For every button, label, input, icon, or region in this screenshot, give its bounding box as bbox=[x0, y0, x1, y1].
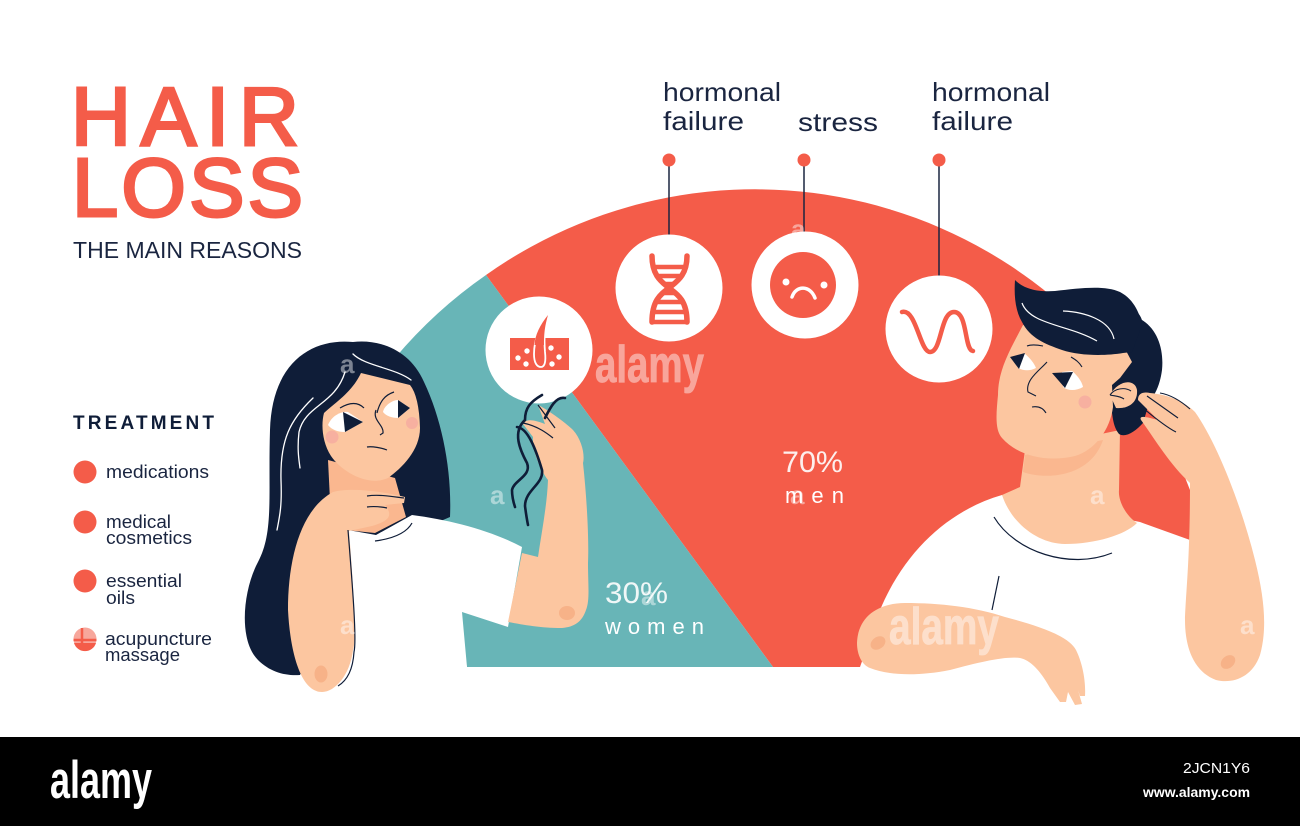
icon: sad face bbox=[752, 232, 858, 338]
woman: eyes bbox=[328, 400, 410, 432]
legend item: acupuncture massage: massage bbox=[105, 645, 180, 665]
subtitle: THE MAIN REASONS bbox=[73, 237, 302, 263]
woman: face bbox=[322, 373, 420, 481]
woman: elbow spot bbox=[559, 606, 575, 620]
label: stress: stress bbox=[798, 107, 878, 137]
man: cheek bbox=[1078, 396, 1092, 408]
footer: alamy logo: alamy bbox=[50, 751, 152, 810]
watermark: small marks: a bbox=[1090, 480, 1105, 510]
man: fringe bbox=[1015, 280, 1142, 355]
man: resting arm and hand bbox=[857, 603, 1085, 705]
watermark: small marks: a bbox=[790, 480, 805, 510]
man: sleeve line bbox=[992, 576, 999, 610]
watermark: small marks bbox=[340, 214, 1255, 640]
watermark: small marks: a bbox=[340, 349, 355, 379]
woman: facial lines bbox=[340, 392, 394, 450]
man: back hair bbox=[1100, 300, 1162, 435]
legend item: medical cosmetics: medical bbox=[106, 512, 171, 532]
icon: DNA helix bbox=[616, 234, 722, 342]
label line 2: failure bbox=[932, 106, 1013, 136]
woman: chin arm and hand bbox=[288, 490, 405, 692]
man figure bbox=[857, 280, 1264, 705]
man: neck bbox=[1002, 430, 1137, 544]
connector: middle pin bbox=[798, 154, 810, 232]
connector: left pin bbox=[662, 154, 676, 236]
legend item: acupuncture massage: acupuncture bbox=[105, 629, 212, 649]
icon: hormone wave bbox=[886, 276, 992, 382]
connector: right pin bbox=[932, 154, 946, 277]
legend item: medications: medications bbox=[106, 462, 209, 482]
footer bar bbox=[0, 737, 1300, 826]
watermark: small marks: a bbox=[1240, 610, 1255, 640]
woman: hair bbox=[245, 342, 450, 675]
legend item: essential oils: essential bbox=[106, 571, 182, 591]
man: hair highlights bbox=[1022, 303, 1114, 341]
legend item: medical cosmetics bbox=[74, 510, 192, 548]
woman: finger lines bbox=[523, 405, 555, 438]
woman: hair strands bbox=[512, 395, 565, 525]
legend item: medical cosmetics: cosmetics bbox=[106, 528, 192, 548]
legend heading: TREATMENT bbox=[73, 413, 214, 434]
footer: site: www.alamy.com bbox=[1142, 784, 1250, 800]
treatment legend bbox=[73, 413, 214, 665]
icon: hair follicle bbox=[486, 296, 592, 404]
watermark: alamy logos bbox=[595, 336, 999, 656]
woman: finger and arm lines bbox=[338, 495, 404, 686]
label: hormonal failure (right): hormonal bbox=[932, 77, 1050, 107]
chart label: men: men bbox=[785, 483, 844, 508]
man: finger lines bbox=[1143, 393, 1190, 432]
man: ear bbox=[1110, 382, 1137, 408]
title: LOSS bbox=[72, 141, 303, 234]
watermark: alamy logos: alamy bbox=[889, 598, 999, 656]
label line 2: failure bbox=[663, 106, 744, 136]
chart label: women: women bbox=[604, 614, 704, 639]
man: raised arm and hand bbox=[1138, 393, 1264, 681]
woman: elbow spot bbox=[314, 666, 328, 682]
man: neck shadow bbox=[1023, 440, 1103, 476]
chart label: men: 70% bbox=[782, 446, 843, 479]
man: eyes bbox=[1010, 353, 1083, 390]
woman: hair highlights bbox=[277, 354, 411, 530]
watermark: small marks: a bbox=[641, 581, 656, 611]
chart label: women bbox=[604, 577, 704, 639]
man: elbow spot bbox=[868, 633, 888, 653]
woman: neckline bbox=[375, 523, 412, 541]
man: elbow spot bbox=[1218, 652, 1238, 672]
watermark: small marks: a bbox=[340, 610, 355, 640]
man: facial lines bbox=[1027, 345, 1131, 413]
pie chart: men 70% wedge bbox=[486, 189, 1190, 667]
watermark: small marks: a bbox=[791, 214, 806, 244]
pie chart: women 30% wedge bbox=[395, 275, 773, 667]
legend item: essential oils: oils bbox=[106, 588, 135, 608]
title: HAIR bbox=[71, 70, 299, 163]
woman: neck bbox=[328, 460, 406, 533]
title bbox=[71, 70, 303, 234]
watermark: small marks: a bbox=[490, 480, 505, 510]
watermark: alamy logos: alamy bbox=[595, 336, 704, 394]
chart label: men bbox=[782, 446, 844, 508]
footer: image id: 2JCN1Y6 bbox=[1183, 761, 1250, 777]
woman: shirt bbox=[345, 515, 522, 690]
label: hormonal failure (left): hormonal bbox=[663, 77, 781, 107]
man: shirt bbox=[860, 495, 1190, 690]
woman: raised arm and hand bbox=[508, 405, 588, 628]
man: collar line bbox=[994, 517, 1112, 559]
legend item: essential oils bbox=[74, 570, 182, 608]
man: face bbox=[997, 325, 1132, 459]
legend item: acupuncture massage bbox=[74, 628, 212, 665]
legend item: medications bbox=[74, 460, 209, 484]
woman figure bbox=[245, 342, 588, 692]
woman: cheeks bbox=[326, 417, 418, 444]
chart label: women: 30% bbox=[605, 577, 668, 610]
